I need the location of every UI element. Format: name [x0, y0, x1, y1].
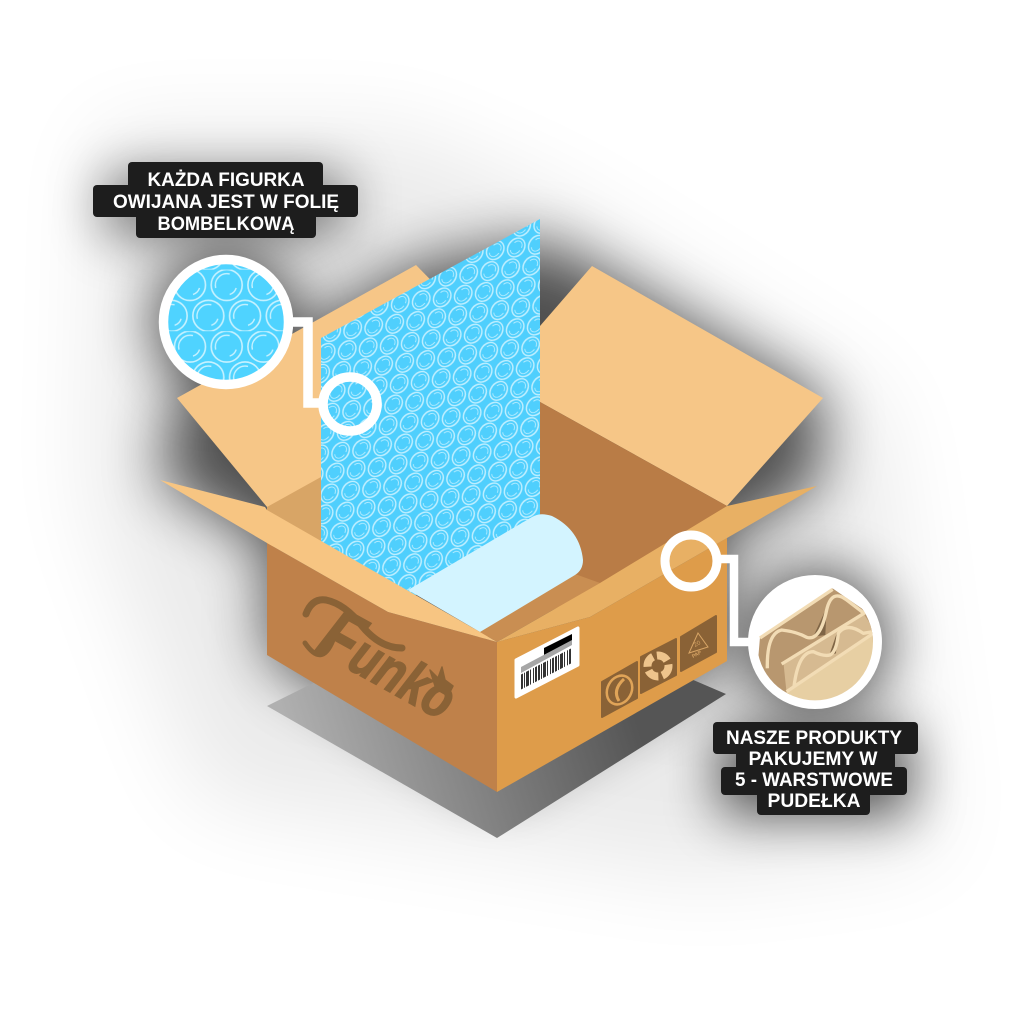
barcode	[521, 655, 572, 682]
heading: corrugated label: PUDEŁKA	[768, 791, 861, 812]
panel: bubble wrap sheet	[321, 219, 540, 600]
icon: PAP 20	[681, 616, 716, 671]
left face	[267, 543, 497, 792]
inner right wall	[440, 402, 727, 640]
icon: corrugated cardboard magnifier	[748, 575, 890, 713]
icon: PAP 20: PAP	[691, 650, 703, 660]
icon: bubble wrap magnifier	[164, 260, 288, 384]
inner left wall	[267, 472, 330, 560]
heading: bubble wrap label: KAŻDA FIGURKA	[148, 170, 305, 191]
heading: bubble wrap label: BOMBELKOWĄ	[158, 214, 295, 235]
logo: Funko: Funko	[306, 591, 474, 735]
heading: corrugated label: PAKUJEMY W	[748, 749, 878, 770]
heading: corrugated label	[713, 722, 918, 815]
callout: corrugated connector	[665, 535, 752, 642]
bubble wrap roll	[408, 514, 583, 632]
cardboard box	[160, 219, 823, 792]
ground shadow	[267, 640, 726, 838]
right front flap	[497, 486, 817, 642]
icon: crown	[430, 667, 453, 696]
icon: recycling	[641, 639, 676, 693]
right face	[497, 538, 727, 792]
back right flap	[540, 266, 823, 506]
heading: bubble wrap label	[93, 162, 358, 238]
heading: corrugated label: NASZE PRODUKTY	[726, 728, 902, 749]
back left flap	[177, 265, 470, 507]
heading: bubble wrap label: OWIJANA JEST W FOLIĘ	[113, 192, 339, 213]
icon: green dot	[602, 662, 637, 717]
left front flap	[160, 480, 497, 642]
icon: PAP 20: 20	[693, 640, 702, 649]
shipping label	[516, 628, 578, 697]
corrugated base	[758, 588, 873, 694]
background shadow	[90, 130, 940, 880]
box floor edge	[480, 574, 600, 642]
heading: corrugated label: 5 - WARSTWOWE	[735, 770, 893, 791]
callout: bubble wrap connector	[288, 322, 377, 431]
